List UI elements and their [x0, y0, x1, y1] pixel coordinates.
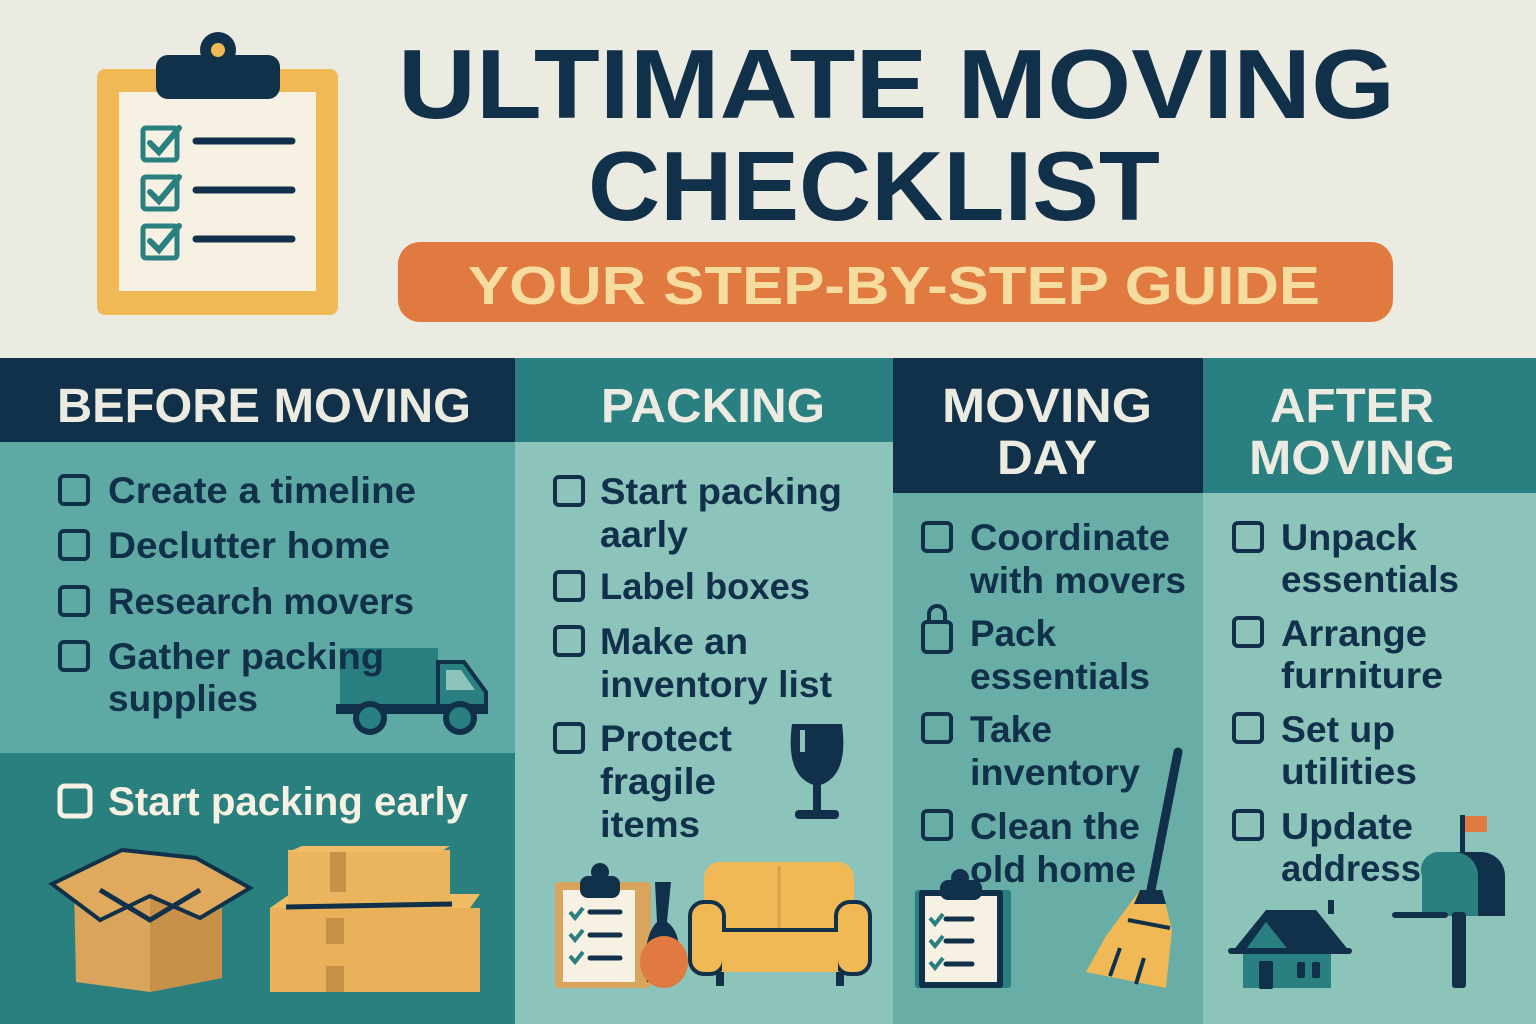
list: moving day — [923, 517, 1186, 890]
list: after moving: utilities — [1281, 751, 1417, 792]
list: packing: Protect — [600, 718, 732, 759]
icon: small clipboard — [555, 863, 651, 988]
heading: before moving — [0, 358, 515, 442]
subtitle banner: YOUR STEP-BY-STEP GUIDE — [468, 256, 1320, 316]
list: after moving: Set up — [1281, 709, 1395, 750]
list: moving day: Coordinate — [970, 517, 1170, 558]
list: moving day: Take — [970, 709, 1052, 750]
panel: after moving — [1203, 358, 1536, 1024]
heading: packing: PACKING — [601, 380, 825, 433]
list: after moving — [1234, 517, 1459, 889]
icon: truck — [336, 648, 488, 732]
icon: wine glass — [791, 724, 843, 819]
subtitle banner — [398, 242, 1393, 322]
list: after moving: Unpack — [1281, 517, 1417, 558]
list: after moving: essentials — [1281, 559, 1459, 600]
panel: packing — [515, 358, 893, 1024]
panel: before moving — [0, 358, 515, 1024]
list: moving day: with movers — [969, 560, 1186, 601]
panel: moving day — [893, 358, 1203, 1024]
list: moving day: Pack — [970, 613, 1056, 654]
heading: moving day: MOVING — [942, 380, 1152, 433]
list: after moving: Arrange — [1281, 613, 1427, 654]
heading: moving day — [893, 358, 1203, 493]
icon: clipboard small — [915, 869, 1011, 988]
list: after moving: Update — [1281, 806, 1413, 847]
icon: clipboard — [97, 32, 338, 315]
list: packing: Start packing — [600, 471, 842, 512]
heading: after moving: MOVING — [1249, 432, 1455, 485]
list: packing: Label boxes — [600, 566, 810, 607]
list item: start packing early: Start packing early — [108, 780, 469, 824]
list: before moving: supplies — [108, 678, 258, 719]
list: before moving: Research movers — [108, 581, 414, 622]
list: before moving: Gather packing — [108, 636, 384, 677]
list: before moving: Declutter home — [108, 525, 390, 566]
icon: open box — [52, 850, 250, 992]
list: moving day: old home — [970, 849, 1136, 890]
title: ULTIMATE MOVING — [398, 29, 1395, 139]
title — [398, 29, 1395, 241]
list: before moving: Create a timeline — [108, 470, 416, 511]
list: packing: aarly — [600, 514, 688, 555]
icon: house — [1228, 900, 1352, 989]
heading: moving day: DAY — [997, 432, 1097, 485]
list: after moving: address — [1281, 848, 1421, 889]
icon: bottle and pumpkin — [640, 882, 688, 988]
list: packing: items — [600, 804, 700, 845]
list: moving day: Clean the — [970, 806, 1140, 847]
title: CHECKLIST — [588, 131, 1160, 241]
list: packing — [555, 471, 842, 845]
icon: sofa — [690, 862, 870, 986]
list: packing: Make an — [600, 621, 748, 662]
list: packing: inventory list — [600, 664, 832, 705]
heading: after moving — [1203, 358, 1536, 493]
heading: packing — [515, 358, 893, 442]
list: packing: fragile — [600, 761, 716, 802]
heading: before moving: BEFORE MOVING — [57, 380, 471, 433]
icon: stacked boxes — [270, 846, 480, 992]
icon: mailbox — [1392, 815, 1505, 988]
list: after moving: furniture — [1281, 655, 1443, 696]
list: moving day: inventory — [970, 752, 1140, 793]
heading: after moving: AFTER — [1270, 380, 1434, 433]
list: moving day: essentials — [970, 656, 1150, 697]
list: before moving — [60, 470, 416, 719]
icon: broom — [1086, 752, 1178, 988]
